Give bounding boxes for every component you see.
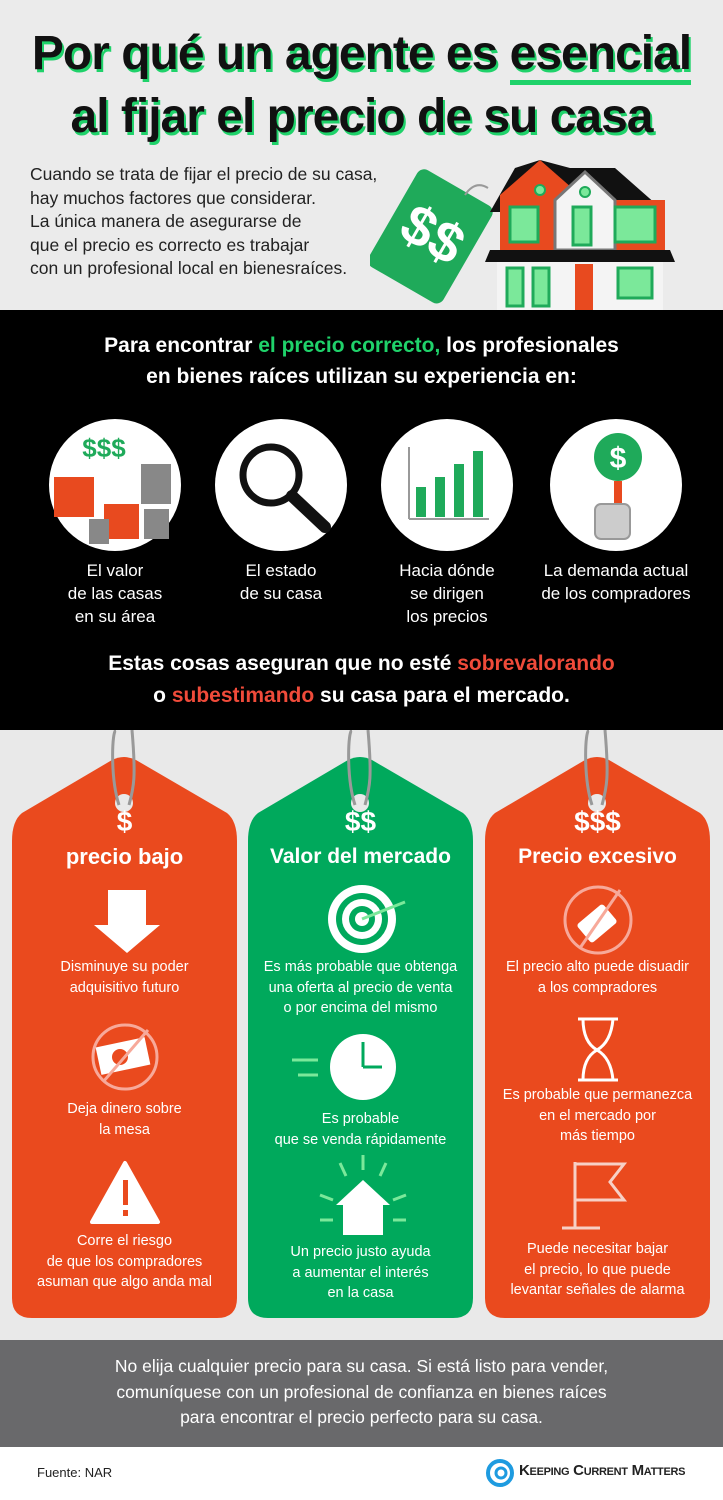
intro text: Cuando se trata de fijar el precio de su casa, — [30, 164, 377, 184]
labels: de las casas — [68, 584, 162, 603]
statement: Estas cosas aseguran que no esté sobrevalorando — [108, 652, 615, 675]
tag texts: valor del mercado — [270, 806, 451, 868]
panel: price tags — [12, 730, 710, 1318]
icon: clock — [292, 1034, 396, 1100]
icon: tag crossed — [565, 887, 631, 953]
text: de que los compradores — [47, 1254, 202, 1270]
text: una oferta al precio de venta — [269, 980, 452, 996]
icon: target — [328, 885, 405, 953]
text: más tiempo — [560, 1128, 635, 1144]
tag texts: precio bajo — [66, 806, 183, 869]
bottom bar — [0, 1447, 723, 1500]
header panel — [0, 0, 723, 310]
text: el precio, lo que puede — [524, 1262, 671, 1278]
text: Disminuye su poder — [60, 959, 189, 975]
text: Deja dinero sobre — [67, 1101, 182, 1117]
tag texts: precio excesivo — [518, 806, 677, 868]
icon: bar chart — [381, 419, 513, 551]
panel: black expertise section: Hacia dónde — [399, 561, 495, 580]
panel: black expertise section: de los compradores — [541, 584, 691, 603]
text: o por encima del mismo — [284, 1000, 437, 1016]
icon: houses value: $$$ — [82, 433, 126, 463]
text: a los compradores — [538, 980, 657, 996]
text: Es probable que permanezca — [503, 1087, 692, 1103]
intro text: que el precio es correcto es trabajar — [30, 234, 309, 254]
statement: o subestimando su casa para el mercado. — [153, 684, 570, 707]
tag: precio excesivo — [485, 730, 710, 1318]
text: Puede necesitar bajar — [527, 1241, 668, 1257]
labels — [68, 561, 162, 626]
heading: Para encontrar el precio correcto, los profesionales — [104, 334, 619, 357]
tag texts: precio bajo: precio bajo — [66, 844, 183, 869]
labels: El valor — [87, 561, 143, 580]
tag: precio bajo — [12, 730, 237, 1318]
tag texts: valor del mercado: Valor del mercado — [270, 845, 451, 868]
tag texts: precio excesivo: Precio excesivo — [518, 845, 677, 868]
icon: thumb sign: $ — [610, 442, 627, 475]
icon: thumb sign — [550, 419, 682, 551]
intro text: La única manera de asegurarse de — [30, 211, 301, 231]
text: asuman que algo anda mal — [37, 1274, 212, 1290]
tag: valor del mercado — [248, 730, 473, 1318]
text: Es más probable que obtenga — [264, 959, 457, 975]
panel: black expertise section — [0, 310, 723, 730]
footer call to action — [0, 1340, 723, 1447]
logo: Keeping Current Matters — [519, 1462, 685, 1479]
title: al fijar el precio de su casa — [71, 90, 652, 143]
intro text — [30, 164, 377, 278]
heading: en bienes raíces utilizan su experiencia en: — [146, 365, 577, 388]
tag texts: precio bajo: $ — [117, 806, 132, 837]
tag texts: valor del mercado: $$ — [345, 806, 376, 837]
footer call to action: comuníquese con un profesional de confianza en bienes raíces — [116, 1382, 607, 1402]
text: en el mercado por — [539, 1108, 656, 1124]
text: Corre el riesgo — [77, 1233, 172, 1249]
text: El precio alto puede disuadir — [506, 959, 689, 975]
icon: houses value — [49, 419, 181, 551]
text: levantar señales de alarma — [510, 1282, 685, 1298]
panel: black expertise section: El estado — [246, 561, 316, 580]
text: Es probable — [322, 1111, 399, 1127]
title: Por qué un agente es esencial — [32, 27, 691, 80]
icon: flag — [562, 1162, 624, 1228]
panel: black expertise section: se dirigen — [410, 584, 484, 603]
text: que se venda rápidamente — [275, 1132, 446, 1148]
title — [32, 27, 691, 145]
statement — [108, 652, 615, 707]
text: adquisitivo futuro — [70, 980, 179, 996]
icon: hourglass — [578, 1019, 618, 1080]
panel: black expertise section: los precios — [406, 607, 488, 626]
text: en la casa — [327, 1285, 394, 1301]
icon: house glow — [320, 1155, 406, 1235]
text: a aumentar el interés — [292, 1264, 429, 1280]
illustration: price tag and house — [370, 160, 675, 310]
footer call to action: para encontrar el precio perfecto para su casa. — [180, 1407, 543, 1427]
icon: magnifier — [215, 419, 347, 551]
icon: down arrow — [94, 890, 160, 953]
text: Un precio justo ayuda — [290, 1244, 431, 1260]
icon: warning — [92, 1163, 158, 1222]
upper house — [490, 160, 665, 212]
text: la mesa — [99, 1122, 150, 1138]
tag texts: precio excesivo: $$$ — [574, 806, 621, 837]
panel: black expertise section: de su casa — [240, 584, 322, 603]
intro text: con un profesional local en bienesraíces. — [30, 258, 347, 278]
source: Fuente: NAR — [37, 1465, 112, 1480]
heading — [104, 334, 619, 388]
labels: en su área — [75, 607, 155, 626]
panel: black expertise section: La demanda actual — [544, 561, 688, 580]
illustration: price tag and house: $$ — [390, 191, 476, 277]
logo — [486, 1459, 685, 1487]
icon: money crossed — [93, 1025, 157, 1089]
footer call to action: No elija cualquier precio para su casa. Si está listo para vender, — [115, 1356, 608, 1376]
intro text: hay muchos factores que considerar. — [30, 188, 316, 208]
